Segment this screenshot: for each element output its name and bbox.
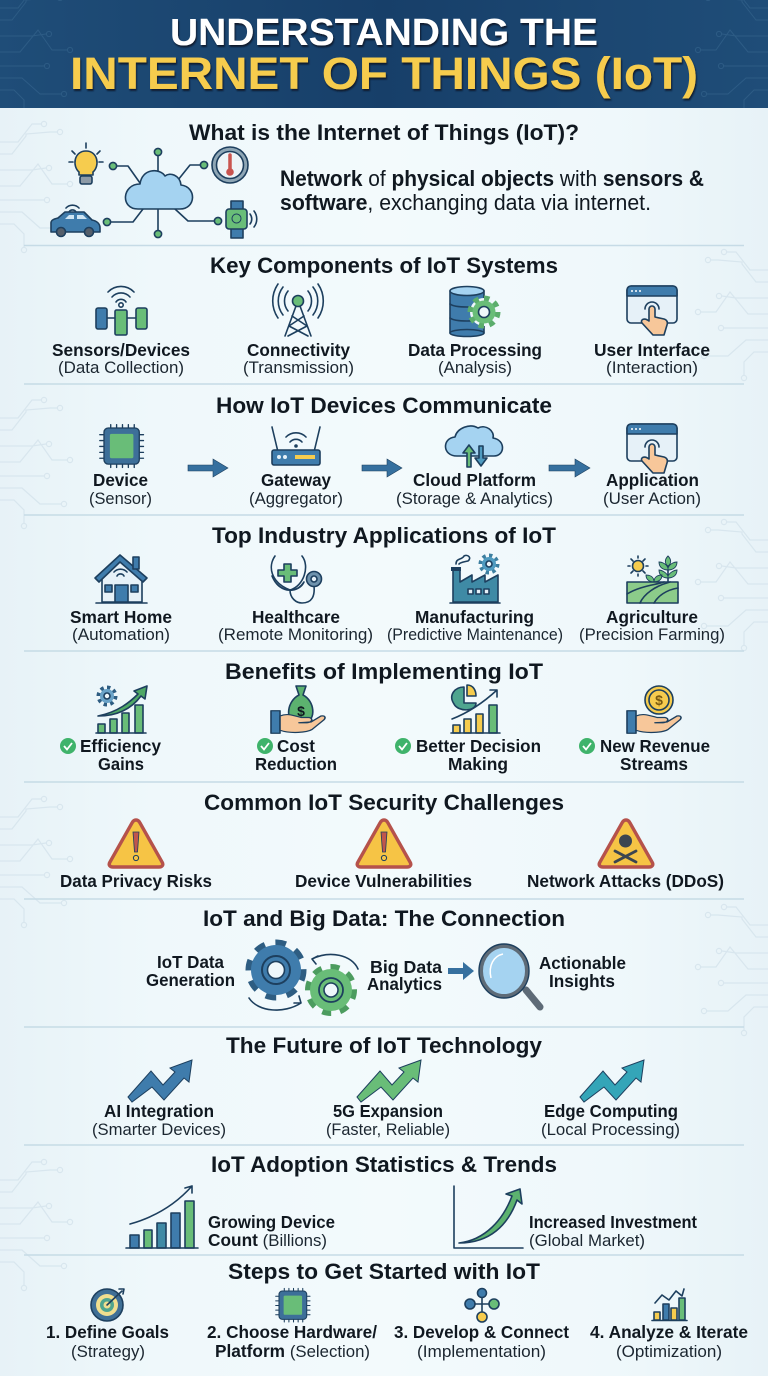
icon: thermometer gauge — [212, 147, 248, 183]
icon: trend arrow — [128, 1060, 192, 1102]
item: healthcare — [218, 556, 373, 644]
label: growing device count: Count (Billions) — [208, 1230, 327, 1250]
item: define goals — [46, 1289, 169, 1361]
panel: industry applications — [70, 523, 725, 644]
icon: warning triangle — [357, 820, 411, 867]
icon: trend arrow — [357, 1060, 421, 1102]
item: cloud platform: Cloud Platform — [413, 470, 536, 490]
line chart: investment — [454, 1186, 523, 1248]
header banner — [0, 0, 768, 119]
heading: key components: Key Components of IoT Systems — [210, 253, 558, 278]
title: UNDERSTANDING THE — [170, 12, 598, 54]
icon: magnifying glass — [479, 944, 540, 1007]
item: data privacy: Data Privacy Risks — [60, 871, 212, 891]
item: better decisions — [395, 685, 541, 774]
arrow — [188, 459, 228, 477]
item: device: (Sensor) — [89, 489, 152, 508]
item: healthcare: (Remote Monitoring) — [218, 625, 373, 644]
heading: statistics: IoT Adoption Statistics & Trends — [211, 1152, 557, 1177]
item: gateway: Gateway — [261, 470, 331, 490]
heading: steps: Steps to Get Started with IoT — [228, 1259, 541, 1284]
description text: software, exchanging data via internet. — [280, 190, 651, 215]
item: device vulnerabilities — [295, 820, 472, 891]
item: sensors/devices — [52, 286, 190, 377]
label: actionable insights — [539, 953, 626, 991]
panel: statistics — [126, 1152, 697, 1250]
item: sensors/devices: (Data Collection) — [58, 358, 184, 377]
item: data privacy — [60, 820, 212, 891]
label: IoT data generation: IoT Data — [157, 952, 224, 972]
panel: big data — [146, 906, 626, 1011]
item: develop and connect — [394, 1288, 569, 1361]
icon: router — [272, 427, 320, 465]
arrow — [362, 459, 402, 477]
item: manufacturing — [387, 555, 563, 644]
item: healthcare: Healthcare — [252, 607, 340, 627]
panel: steps — [46, 1259, 748, 1361]
panel: key components — [52, 253, 710, 377]
item: 5G expansion: (Faster, Reliable) — [326, 1120, 450, 1139]
item: manufacturing: (Predictive Maintenance) — [387, 625, 563, 644]
item: user interface: User Interface — [594, 340, 710, 360]
item: choose hardware — [207, 1288, 377, 1361]
icon: cell tower — [273, 284, 323, 336]
icon: gears — [249, 945, 358, 1011]
item: analyze and iterate — [590, 1289, 748, 1361]
item: AI integration — [92, 1060, 226, 1139]
icon: chart with gear — [96, 686, 147, 733]
icon: check — [579, 738, 595, 754]
label: IoT data generation — [146, 952, 235, 990]
item: cloud platform: (Storage & Analytics) — [396, 489, 553, 508]
icon: stethoscope — [271, 556, 322, 603]
item: new revenue: New Revenue — [600, 736, 710, 756]
label: growing device count — [208, 1212, 335, 1250]
item: application — [603, 424, 701, 508]
panel: communication — [89, 393, 701, 508]
label: IoT data generation: Generation — [146, 970, 235, 990]
diagram: cloud network — [51, 143, 257, 238]
title — [70, 12, 698, 99]
item: smart home — [70, 555, 172, 644]
item: smart home: (Automation) — [72, 625, 170, 644]
item: gateway — [249, 427, 343, 508]
icon: check — [395, 738, 411, 754]
arrow — [448, 962, 474, 980]
heading: industry applications: Top Industry Applications of IoT — [212, 523, 557, 548]
icon: sensors — [96, 286, 147, 335]
icon: trend arrow — [580, 1060, 644, 1102]
item: data processing: Data Processing — [408, 340, 542, 360]
icon: warning triangle — [109, 820, 163, 867]
item: device: Device — [93, 470, 148, 490]
title: INTERNET OF THINGS (IoT) — [70, 48, 698, 99]
label: increased investment: Increased Investment — [529, 1212, 697, 1232]
label: actionable insights: Insights — [549, 971, 615, 991]
item: develop and connect: (Implementation) — [417, 1342, 546, 1361]
label: increased investment: (Global Market) — [529, 1231, 645, 1250]
item: analyze and iterate: (Optimization) — [616, 1342, 722, 1361]
item: new revenue — [579, 686, 710, 774]
label: big data analytics: Big Data — [370, 957, 442, 977]
heading: security: Common IoT Security Challenges — [204, 790, 564, 815]
item: connectivity — [243, 284, 354, 377]
item: define goals: (Strategy) — [71, 1342, 145, 1361]
heading: future: The Future of IoT Technology — [226, 1033, 543, 1058]
item: sensors/devices: Sensors/Devices — [52, 340, 190, 360]
heading: benefits: Benefits of Implementing IoT — [225, 659, 544, 684]
item: new revenue: Streams — [620, 754, 688, 774]
icon: touch window — [627, 286, 677, 335]
item: choose hardware: 2. Choose Hardware/ — [207, 1322, 377, 1342]
item: better decisions: Making — [448, 754, 508, 774]
item: cost reduction: Reduction — [255, 754, 337, 774]
description text — [280, 166, 704, 215]
item: edge computing — [541, 1060, 680, 1139]
item: user interface: (Interaction) — [606, 358, 698, 377]
item: smart home: Smart Home — [70, 607, 172, 627]
item: user interface — [594, 286, 710, 377]
bar chart: device count — [126, 1186, 198, 1248]
item: agriculture — [579, 556, 725, 644]
item: choose hardware: Platform (Selection) — [215, 1341, 370, 1361]
icon: touch window — [627, 424, 677, 473]
icon: pie and bars — [451, 685, 500, 733]
icon: factory — [450, 555, 500, 603]
panel: security — [60, 790, 724, 891]
item: application: (User Action) — [603, 489, 701, 508]
item: data processing: (Analysis) — [438, 358, 512, 377]
item: agriculture: (Precision Farming) — [579, 625, 725, 644]
icon: chip — [276, 1288, 310, 1322]
item: develop and connect: 3. Develop & Connect — [394, 1322, 569, 1342]
item: 5G expansion: 5G Expansion — [333, 1101, 443, 1121]
label: big data analytics — [367, 957, 442, 994]
item: AI integration: (Smarter Devices) — [92, 1120, 226, 1139]
item: cost reduction: Cost — [277, 736, 315, 756]
item: efficiency gains — [60, 686, 161, 774]
icon: database with gear — [450, 286, 497, 336]
item: gateway: (Aggregator) — [249, 489, 343, 508]
panel: what is IoT — [51, 120, 704, 238]
item: device vulnerabilities: Device Vulnerabilities — [295, 871, 472, 891]
item: application: Application — [606, 470, 699, 490]
item: network attacks — [527, 820, 724, 891]
description text: Network of physical objects with sensors & — [280, 166, 704, 191]
item: better decisions: Better Decision — [416, 736, 541, 756]
item: manufacturing: Manufacturing — [415, 607, 534, 627]
item: analyze and iterate: 4. Analyze & Iterate — [590, 1322, 748, 1342]
heading: big data: IoT and Big Data: The Connection — [203, 906, 565, 931]
item: define goals: 1. Define Goals — [46, 1322, 169, 1342]
icon: coin on hand: $ — [655, 692, 663, 708]
label: actionable insights: Actionable — [539, 953, 626, 973]
panel: future — [92, 1033, 680, 1139]
heading: communication: How IoT Devices Communicate — [216, 393, 552, 418]
icon: skull warning triangle — [599, 820, 653, 867]
icon: connected car — [51, 205, 100, 236]
item: edge computing: (Local Processing) — [541, 1120, 680, 1139]
item: edge computing: Edge Computing — [544, 1101, 678, 1121]
icon: money bag on hand: $ — [297, 703, 305, 719]
label: big data analytics: Analytics — [367, 974, 442, 994]
panel: benefits — [60, 659, 710, 774]
icon: check — [257, 738, 273, 754]
icon: chip — [100, 425, 143, 467]
item: network attacks: Network Attacks (DDoS) — [527, 871, 724, 891]
label: increased investment — [529, 1212, 697, 1250]
item: efficiency gains: Efficiency — [80, 736, 161, 756]
icon: mini chart — [652, 1289, 687, 1320]
item: cloud platform — [396, 426, 553, 508]
item: connectivity: (Transmission) — [243, 358, 354, 377]
arrow — [549, 459, 590, 477]
item: agriculture: Agriculture — [606, 607, 698, 627]
item: efficiency gains: Gains — [98, 754, 144, 774]
item: data processing — [408, 286, 542, 377]
icon: cloud with arrows — [445, 426, 502, 467]
item: AI integration: AI Integration — [104, 1101, 214, 1121]
icon: smart watch — [226, 201, 257, 238]
icon: node tree — [465, 1288, 499, 1322]
icon: house — [95, 555, 147, 603]
icon: farm field — [627, 556, 678, 603]
icon: check — [60, 738, 76, 754]
heading: what is IoT: What is the Internet of Things (IoT)? — [189, 120, 579, 145]
item: cost reduction — [255, 686, 337, 774]
label: growing device count: Growing Device — [208, 1212, 335, 1232]
icon: target — [91, 1289, 124, 1321]
item: 5G expansion — [326, 1060, 450, 1139]
item: connectivity: Connectivity — [247, 340, 350, 360]
icon: light bulb — [69, 143, 103, 184]
item: device — [89, 425, 152, 508]
